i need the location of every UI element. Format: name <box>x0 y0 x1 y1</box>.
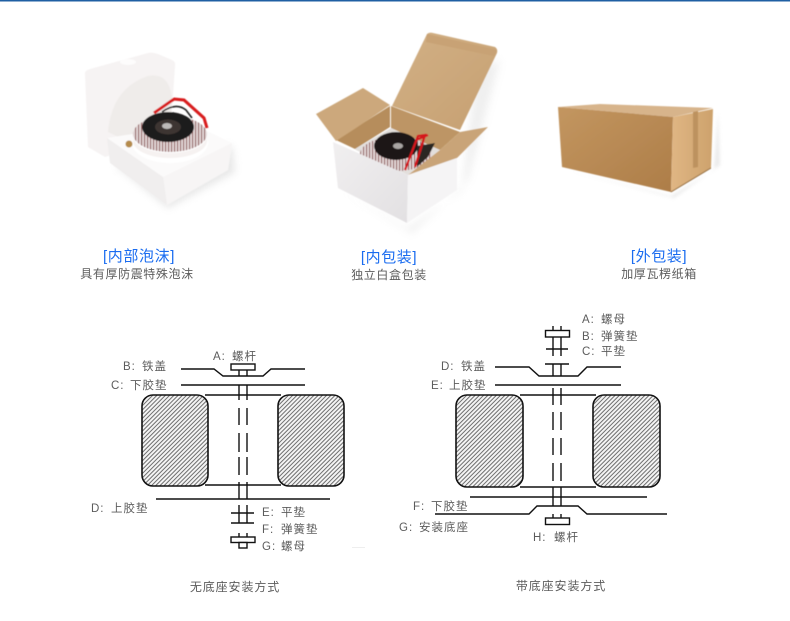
diagram: mounting with base <box>399 313 667 593</box>
labels: F: <box>413 501 425 513</box>
labels: 螺杆 <box>232 349 257 363</box>
labels: 铁盖 <box>142 359 167 373</box>
labels: B: <box>582 331 595 343</box>
labels: 下胶垫 <box>130 378 168 392</box>
core windings <box>142 395 344 486</box>
caption: inner box: 独立白盒包装 <box>351 267 427 282</box>
labels: C: <box>582 346 596 358</box>
labels: D: <box>91 503 104 515</box>
caption: inner box: [内包装] <box>361 249 417 266</box>
bolt and washers <box>156 364 330 548</box>
labels: E: <box>262 507 275 519</box>
diagram title: 带底座安装方式 <box>516 578 606 593</box>
caption: outer carton: 加厚瓦楞纸箱 <box>621 266 697 281</box>
labels: 上胶垫 <box>449 378 486 392</box>
photo: outer corrugated carton <box>558 104 720 198</box>
caption: inner foam <box>80 248 194 281</box>
labels: G: <box>399 522 413 534</box>
labels: 安装底座 <box>419 520 469 534</box>
labels: 螺母 <box>281 540 306 553</box>
labels: 螺母 <box>601 313 626 326</box>
diagram title: 无底座安装方式 <box>190 579 280 594</box>
labels: 平垫 <box>601 344 626 358</box>
labels: 上胶垫 <box>111 501 148 515</box>
photo: white inner box with kraft interior <box>316 33 500 233</box>
photo: foam packaging with transformer <box>85 53 235 208</box>
labels: G: <box>262 541 276 553</box>
top bar <box>0 0 790 2</box>
caption: outer carton: [外包装] <box>631 248 687 265</box>
caption: inner foam: 具有厚防震特殊泡沫 <box>80 266 194 281</box>
caption: inner foam: [内部泡沫] <box>103 248 175 265</box>
bolt and washers <box>435 326 667 524</box>
labels: E: <box>431 380 444 392</box>
labels: B: <box>123 361 136 373</box>
caption: outer carton <box>621 248 697 281</box>
caption: inner box <box>351 249 427 282</box>
labels: 下胶垫 <box>431 499 468 513</box>
labels: 弹簧垫 <box>281 522 318 536</box>
labels: F: <box>262 524 274 536</box>
labels: C: <box>111 380 124 392</box>
labels: 弹簧垫 <box>601 329 638 343</box>
core windings <box>456 395 660 487</box>
labels: A: <box>213 351 226 363</box>
labels: H: <box>533 532 546 544</box>
labels <box>399 313 638 544</box>
labels: 螺杆 <box>554 530 579 544</box>
labels: A: <box>582 314 595 326</box>
labels <box>91 349 318 553</box>
diagram: mounting without base <box>91 349 344 594</box>
labels: D: <box>441 361 454 373</box>
labels: 铁盖 <box>461 359 486 373</box>
labels: 平垫 <box>281 505 306 519</box>
